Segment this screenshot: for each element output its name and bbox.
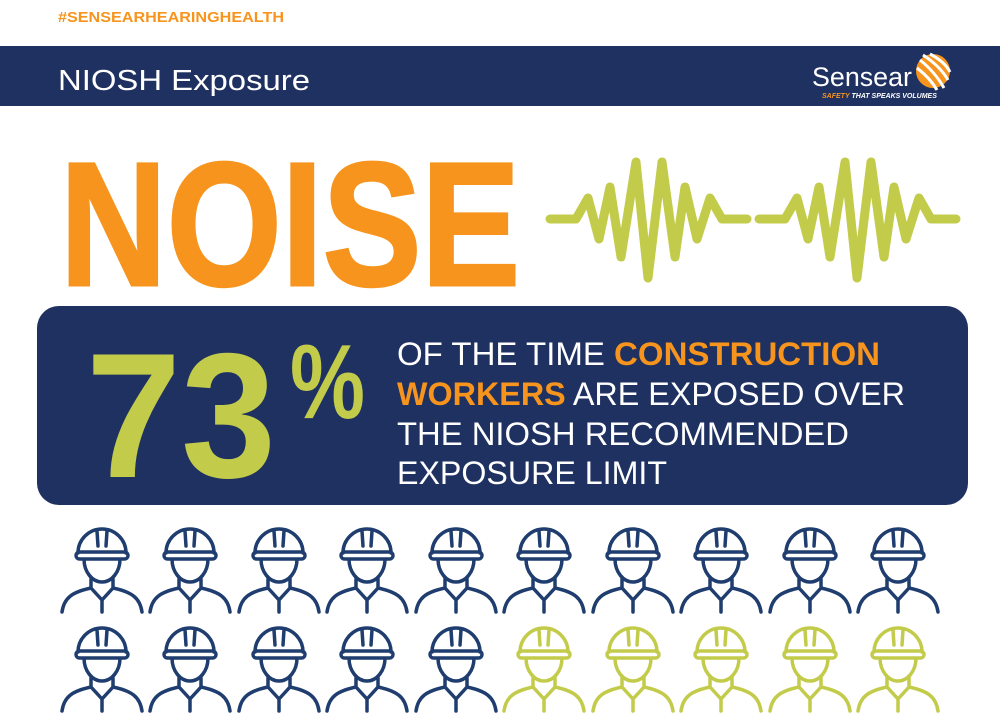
stat description [397,336,905,491]
logo: SAFETY THAT SPEAKS VOLUMES [822,93,937,100]
stat description: THE NIOSH RECOMMENDED [397,416,849,452]
stat panel [37,306,968,515]
banner title: NIOSH Exposure [58,65,310,97]
stat description: OF THE TIME CONSTRUCTION [397,336,880,372]
NOISE heading: NOISE [60,127,520,323]
hashtag: #SENSEARHEARINGHEALTH [58,10,284,26]
worker icons grid [62,529,938,711]
big stat 73%: % [290,323,365,441]
icon: sound waves [550,162,956,278]
stat description: WORKERS ARE EXPOSED OVER [397,376,905,412]
header banner [0,46,1000,106]
logo [812,54,950,100]
big stat 73%: 73 [86,316,276,515]
stat description: EXPOSURE LIMIT [397,455,667,491]
logo: Sensear [812,62,912,92]
